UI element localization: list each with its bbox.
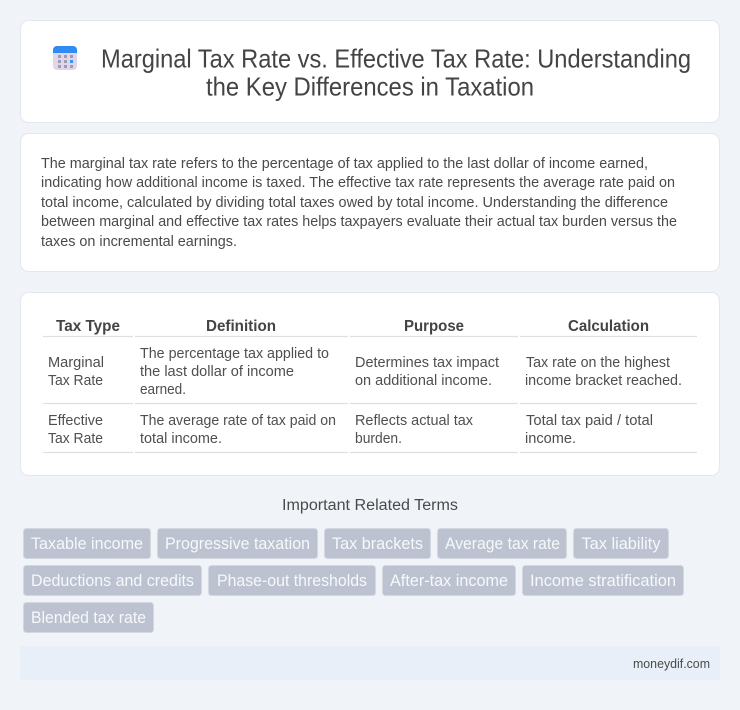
tag list: Progressive taxation [165,535,310,553]
tag list: Phase-out thresholds [217,572,367,590]
table row: marginal tax rate: earned. [140,382,186,398]
title: Marginal Tax Rate vs. Effective Tax Rate: Understanding [101,46,691,74]
table row: effective tax rate: Reflects actual tax [355,413,474,429]
table row: effective tax rate: Total tax paid / total [526,413,653,429]
text block: description: between marginal and effective tax rates helps taxpayers evaluate their actual tax burden versus the [41,214,677,230]
tag list: Blended tax rate [31,609,146,627]
tag list: Average tax rate [445,535,560,553]
table header: Calculation [568,318,649,335]
tag list: Taxable income [31,535,143,553]
table row: marginal tax rate: The percentage tax applied to [140,346,329,362]
tag list: Tax liability [582,535,661,553]
table row: marginal tax rate: the last dollar of income [140,364,294,380]
table header: Tax Type [56,318,120,335]
table row: marginal tax rate: Tax rate on the highest [526,355,670,371]
tag list [24,528,684,632]
text block: description: total income, calculated by dividing total taxes owed by total income. Understanding the difference [41,195,668,211]
table row: effective tax rate: burden. [355,431,402,447]
table header [56,318,649,335]
table row: marginal tax rate [48,346,682,398]
table row: marginal tax rate: Determines tax impact [355,355,499,371]
title: the Key Differences in Taxation [206,74,534,102]
table header: Purpose [404,318,464,335]
table row: effective tax rate [48,413,653,447]
icon: calendar [53,46,77,70]
table row: effective tax rate: total income. [140,431,222,447]
text block: description: taxes on incremental earnings. [41,234,237,250]
footer [20,646,720,680]
tag list: Tax brackets [332,535,423,553]
table row: effective tax rate: The average rate of tax paid on [140,413,336,429]
table row: effective tax rate: income. [525,431,576,447]
table row: marginal tax rate: income bracket reached. [525,373,682,389]
panel: description [20,134,720,272]
footer: moneydif.com [633,657,710,671]
title [101,46,691,102]
table row: marginal tax rate: on additional income. [355,373,492,389]
text block: description: indicating how additional income is taxed. The effective tax rate represents the average rate paid on [41,175,675,191]
tag list: Income stratification [530,572,676,590]
text block: description: The marginal tax rate refers to the percentage of tax applied to the last dollar of income earned, [41,156,648,172]
panel: comparison table [20,292,720,476]
tag list: After-tax income [390,572,508,590]
table row: effective tax rate: Effective [48,413,103,429]
heading: related terms: Important Related Terms [282,497,458,514]
table header: Definition [206,318,276,335]
table row: effective tax rate: Tax Rate [48,431,103,447]
table row: marginal tax rate: Marginal [48,355,104,371]
tag list: Deductions and credits [31,572,194,590]
panel: title card [20,20,720,122]
table row: marginal tax rate: Tax Rate [48,373,103,389]
text block: description [41,156,677,250]
